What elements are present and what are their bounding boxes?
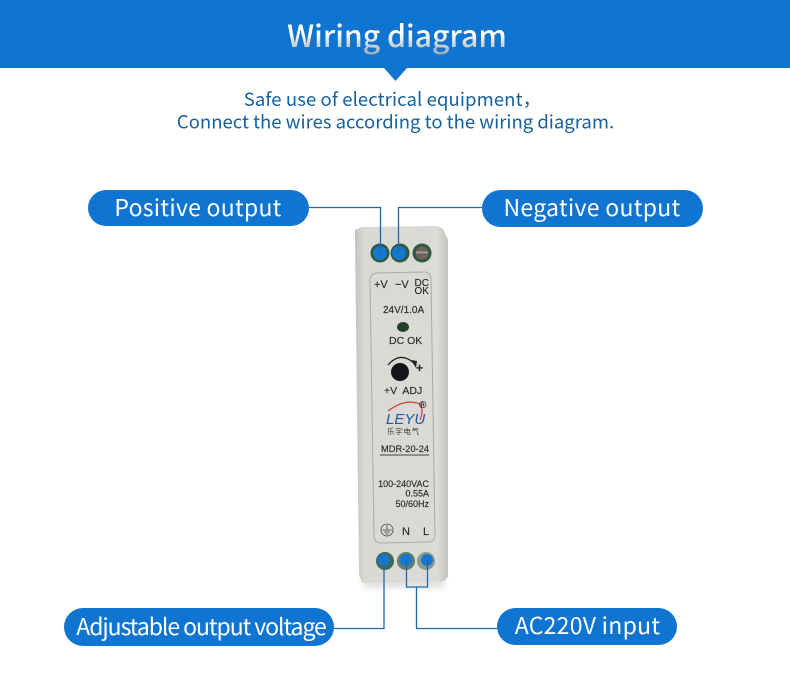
connector: negative output <box>398 208 482 253</box>
input rating text: 50/60Hz <box>395 499 429 509</box>
intro text: Safe use of electrical equipment， <box>244 86 541 112</box>
intro text: Connect the wires according to the wiring diagram. <box>177 108 614 134</box>
LEYU logo <box>386 400 427 437</box>
device shadow <box>364 572 444 588</box>
LEYU logo: LEYU <box>386 411 425 428</box>
panel text: outputs <box>374 278 429 397</box>
DC OK LED <box>397 322 409 332</box>
panel text: outputs: +V <box>374 279 388 291</box>
label: positive output <box>88 189 309 226</box>
panel text: outputs: DC OK <box>389 335 422 347</box>
connector: adjustable output voltage <box>334 560 384 628</box>
input rating text <box>378 479 429 509</box>
adjust knob with arrow <box>388 357 423 381</box>
LEYU logo: ® <box>419 400 427 411</box>
adjust knob with arrow: + <box>416 361 423 375</box>
model number: MDR-20-24 <box>381 444 429 454</box>
LEYU logo: 乐宇电气 <box>387 426 420 437</box>
terminal labels: earth N L: L <box>423 526 429 538</box>
terminal labels: earth N L: N <box>402 526 410 538</box>
panel text: outputs: −V <box>395 279 409 291</box>
label: negative output: Negative output <box>503 189 681 223</box>
top terminals <box>370 244 432 262</box>
connector: AC220V input <box>406 560 497 628</box>
title: Wiring diagram <box>287 12 507 56</box>
terminal labels: earth N L <box>381 524 429 538</box>
intro text <box>177 86 614 134</box>
input rating text: 0.55A <box>405 488 429 498</box>
device body <box>355 226 448 583</box>
header banner <box>0 0 790 81</box>
bottom terminals <box>376 552 435 570</box>
panel text: outputs: 24V/1.0A <box>383 305 424 316</box>
panel text: outputs: +V ADJ <box>384 385 422 397</box>
connector: positive output <box>309 208 380 253</box>
label: AC220V input: AC220V input <box>515 607 660 641</box>
front label panel <box>370 272 435 543</box>
power supply device <box>355 226 448 588</box>
label: adjustable output voltage: Adjustable output voltage <box>76 608 326 642</box>
label: positive output: Positive output <box>114 189 282 223</box>
panel text: outputs: OK <box>414 286 429 297</box>
input rating text: 100-240VAC <box>378 479 429 489</box>
panel text: outputs: DC <box>414 278 429 289</box>
